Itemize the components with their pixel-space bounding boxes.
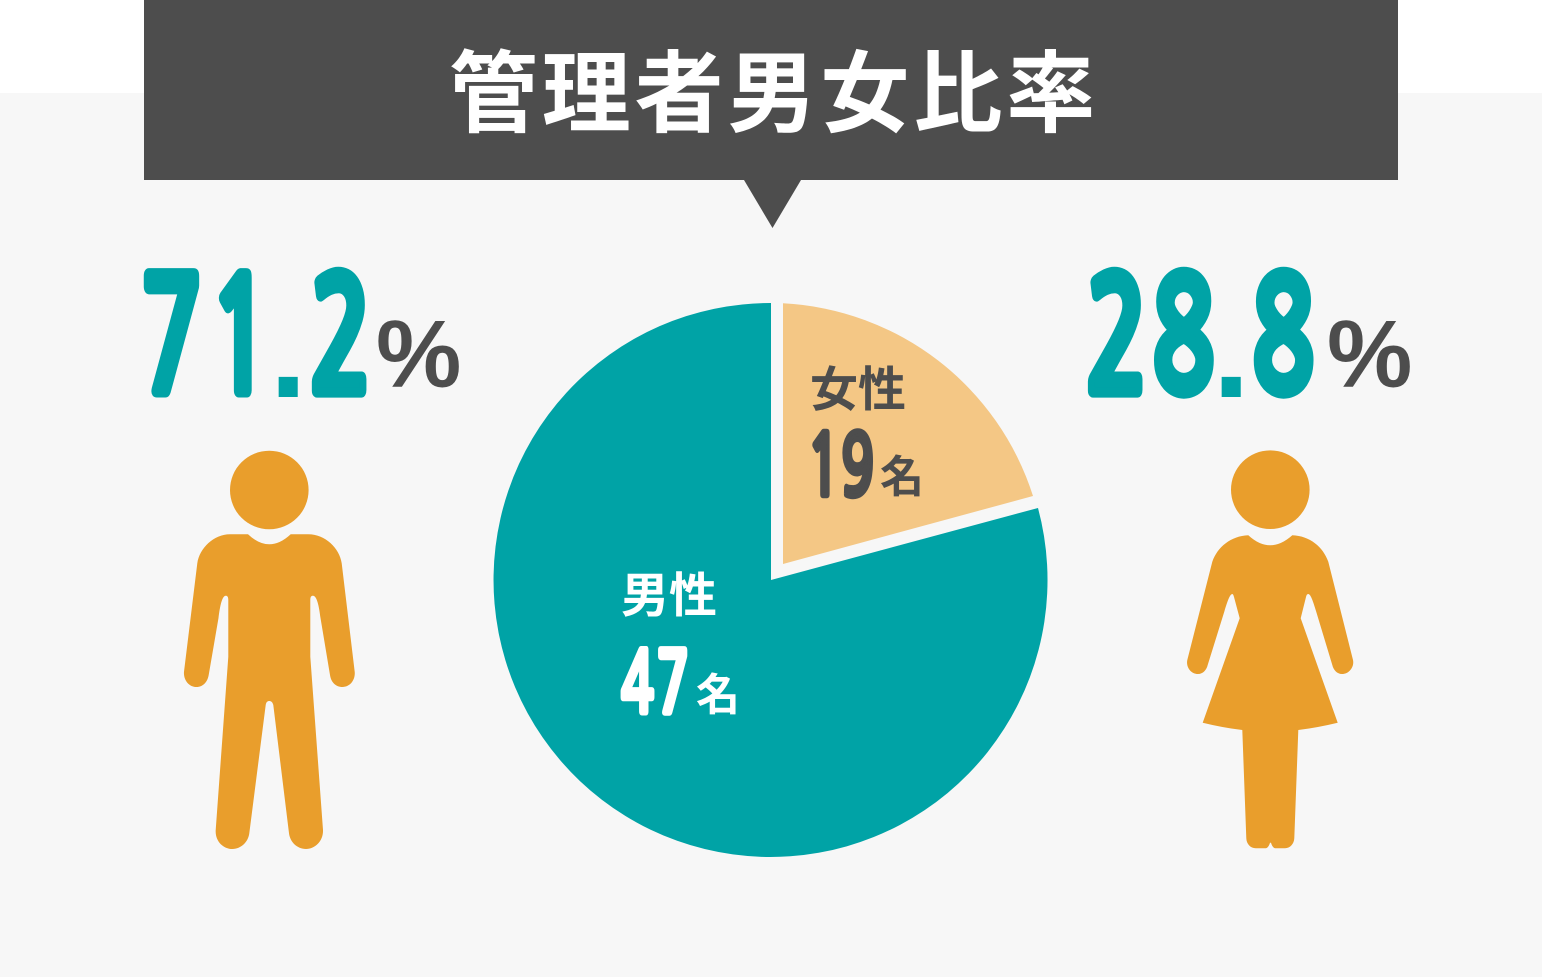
male count	[621, 641, 740, 725]
female value 28.8: 8	[1252, 260, 1315, 416]
male value 71.2: .	[270, 275, 307, 426]
icon: woman	[1187, 450, 1353, 848]
male value 71.2: 71	[140, 260, 272, 416]
female label: 女性	[810, 350, 906, 420]
icon: man	[184, 451, 355, 849]
female count	[807, 424, 924, 508]
female percentage	[1085, 260, 1412, 426]
female value 28.8: 28	[1085, 260, 1215, 416]
female count number: 19	[807, 424, 874, 508]
male label: 男性	[621, 556, 717, 626]
male count number: 47	[621, 641, 690, 725]
male percentage	[140, 260, 461, 426]
title banner	[144, 0, 1398, 228]
male percent sign: %	[376, 301, 461, 408]
title: 管理者男女比率	[449, 22, 1099, 151]
female slice	[783, 303, 1033, 564]
pie chart	[494, 303, 1048, 857]
banner callout shape	[144, 0, 1398, 228]
female value 28.8: .	[1212, 275, 1250, 426]
male value 71.2: 2	[309, 260, 372, 416]
male slice	[494, 303, 1048, 857]
female percent sign: %	[1327, 301, 1412, 408]
male count unit: 名	[696, 659, 740, 723]
female count unit: 名	[880, 441, 924, 505]
male value 71.2	[140, 260, 372, 426]
female value 28.8	[1085, 260, 1315, 426]
